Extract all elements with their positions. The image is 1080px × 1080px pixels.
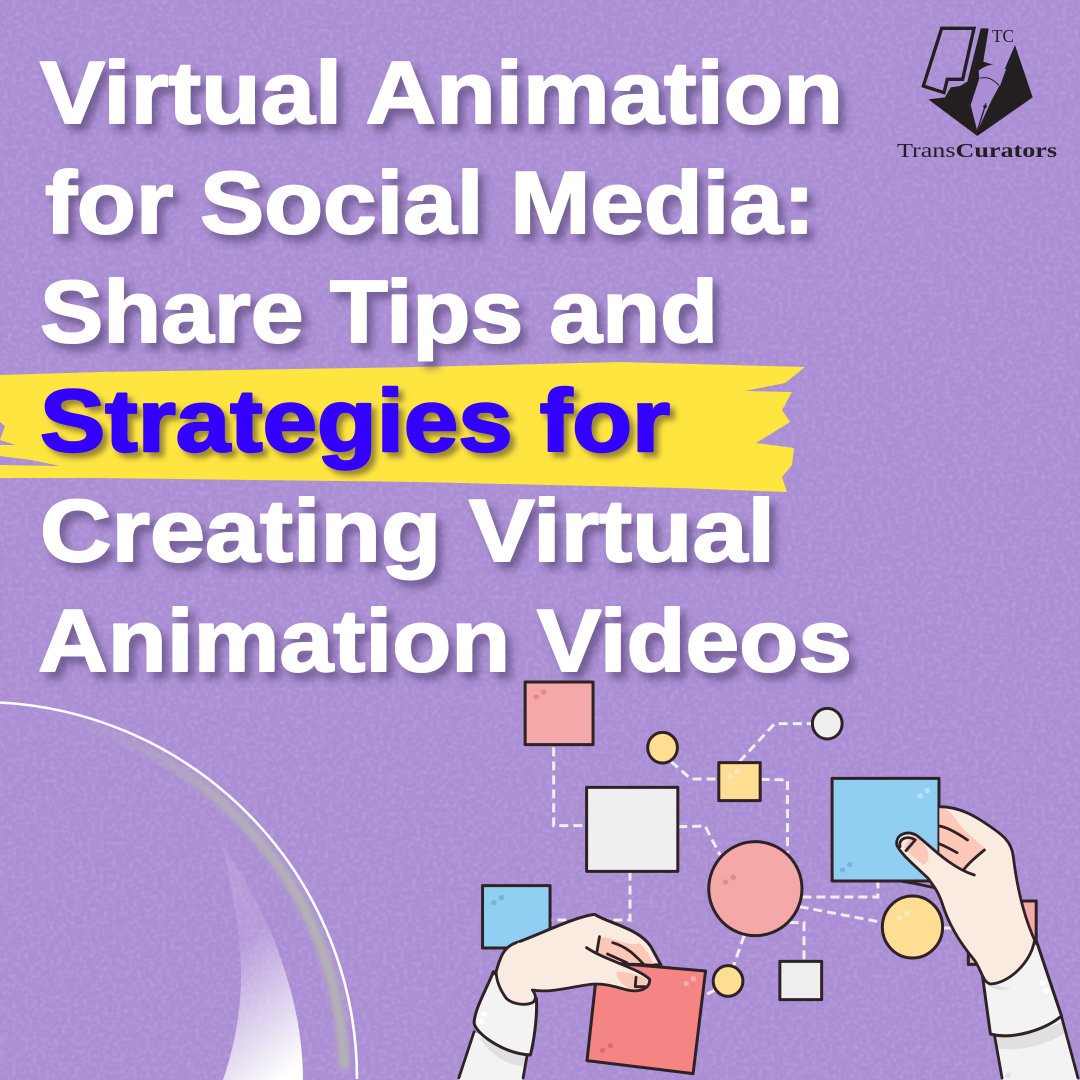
large pink circle <box>709 842 802 936</box>
logo <box>897 26 1057 162</box>
illustration: hands arranging shapes <box>458 682 1079 1080</box>
red card <box>587 962 706 1074</box>
title <box>38 43 852 690</box>
title: Animation Videos <box>38 591 852 690</box>
small light grey square <box>780 961 822 1000</box>
gold circle right <box>882 896 943 958</box>
left hand palm and thumb <box>496 943 650 1004</box>
small gold circle <box>648 732 677 763</box>
blue square held by right hand <box>832 778 939 881</box>
right hand <box>897 807 1035 984</box>
logo wordmark: Trans Curators <box>897 140 1057 162</box>
left sleeve <box>458 972 537 1080</box>
logo mark <box>923 28 1033 136</box>
logo TC letters: TC <box>992 26 1014 46</box>
bubble decoration <box>0 702 357 1080</box>
small gold circle bottom <box>713 966 743 996</box>
title: Share Tips and <box>40 262 718 361</box>
title: Creating Virtual <box>40 481 775 580</box>
title: for Social Media: <box>45 153 815 252</box>
brush highlight <box>0 362 805 492</box>
large light grey square <box>587 787 678 871</box>
gold square <box>719 763 760 801</box>
pink square behind right hand <box>968 901 1036 964</box>
right hand fingers behind blue card <box>903 882 938 888</box>
blue square left <box>483 886 550 948</box>
left hand back and fingers <box>496 914 661 990</box>
pink square <box>525 682 593 745</box>
dashed connectors <box>550 724 968 995</box>
title: Virtual Animation <box>40 43 843 142</box>
light grey circle <box>812 708 842 739</box>
right sleeve <box>982 942 1079 1080</box>
title: Strategies for <box>40 371 670 470</box>
